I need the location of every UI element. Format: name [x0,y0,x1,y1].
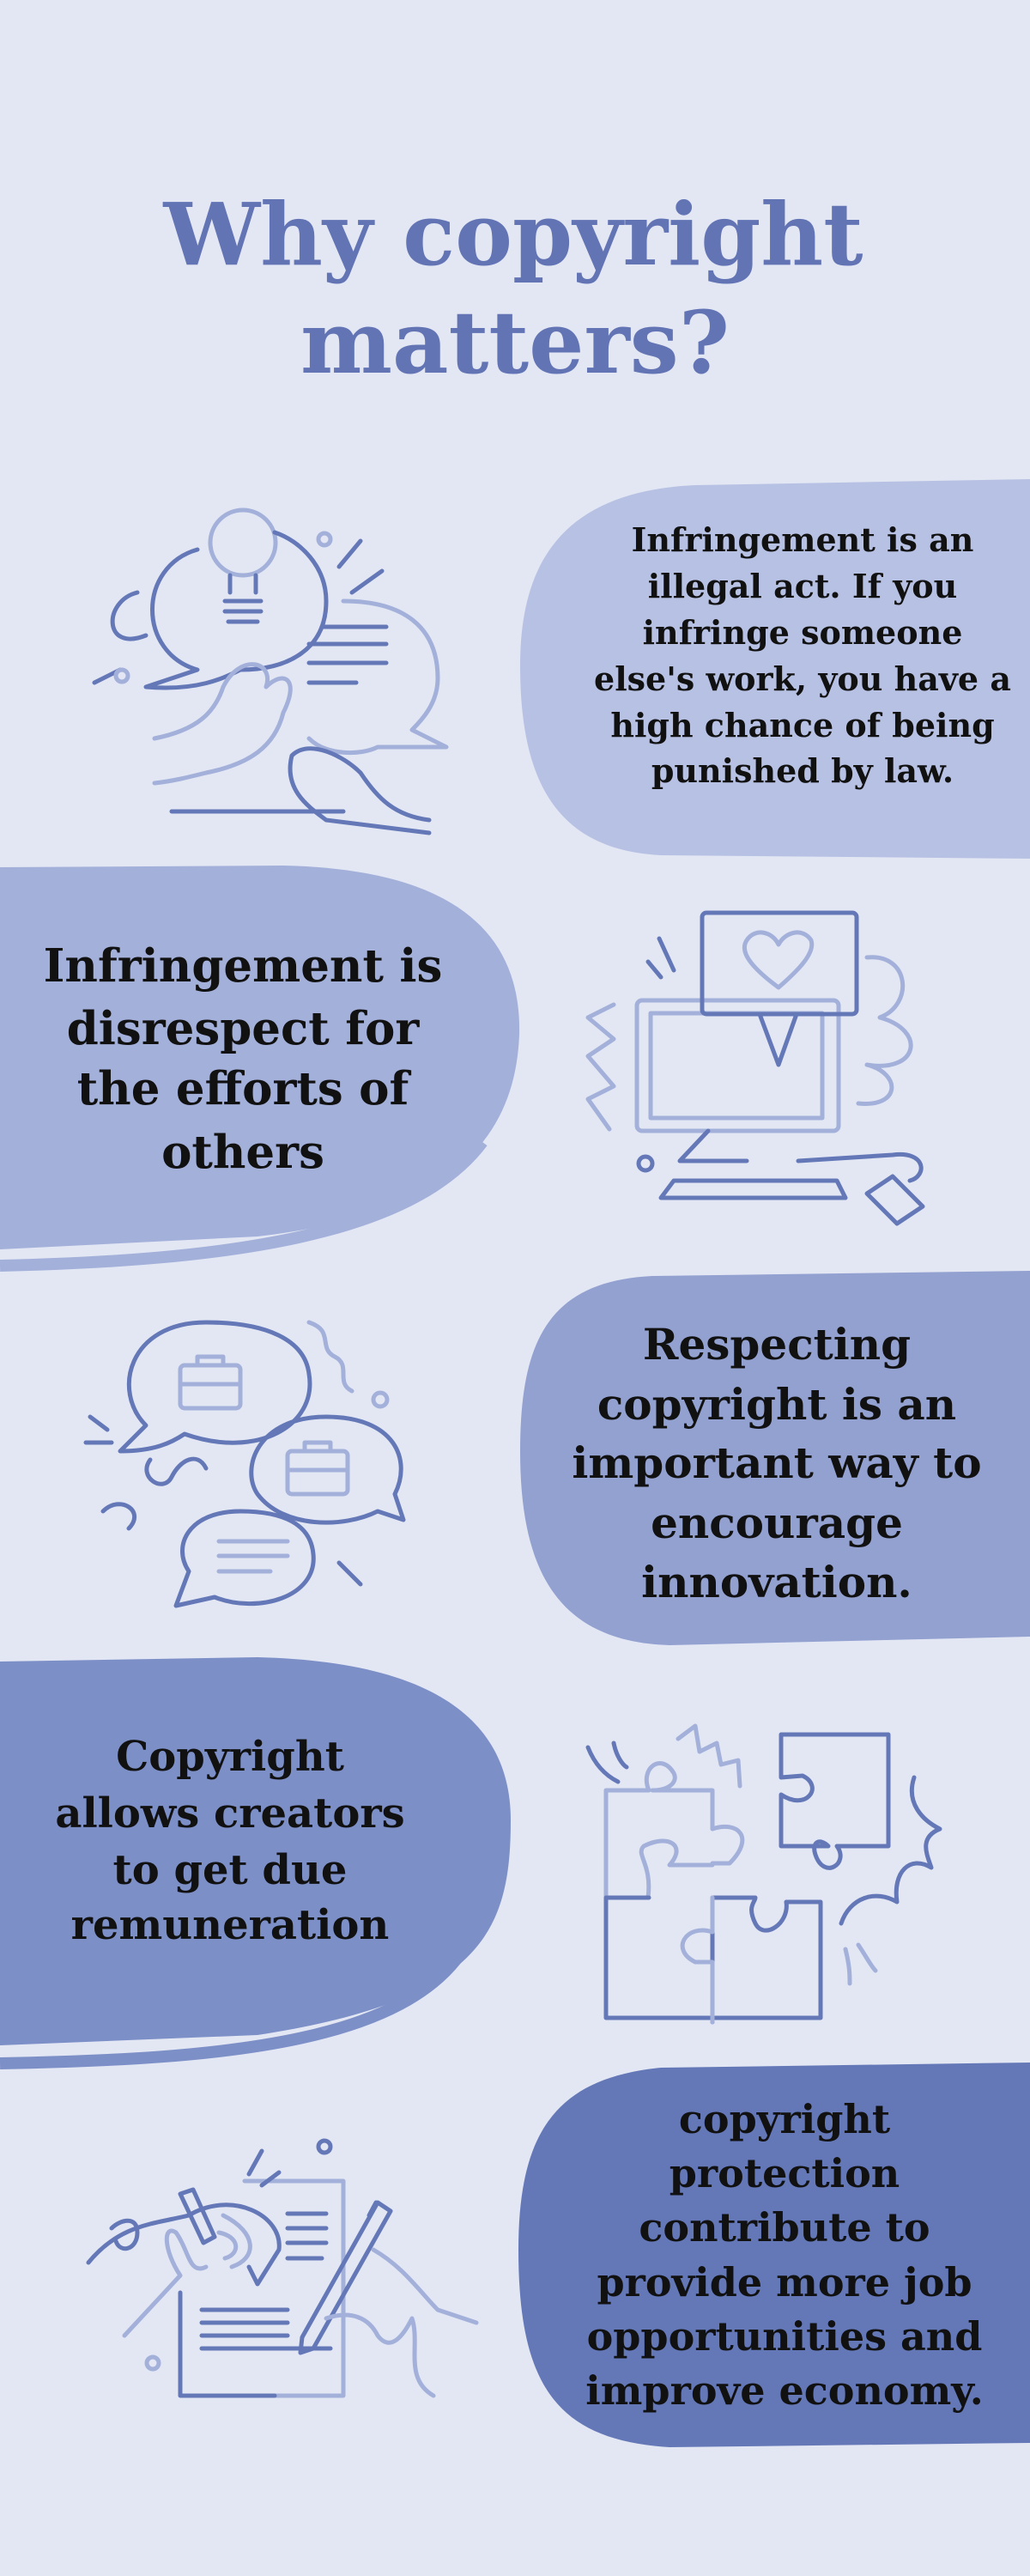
text: illegal act: Infringement is an [632,520,973,559]
title [162,184,863,393]
text: remuneration: to get due [113,1846,347,1894]
text: economy: copyright [679,2096,891,2142]
icon: document signing [88,2141,476,2396]
text: disrespect: disrespect for [67,1002,420,1055]
text: illegal act [594,520,1011,790]
icon: chat bubbles with briefcases [86,1322,403,1606]
text: economy [585,2096,984,2414]
text: innovation: important way to [572,1437,982,1488]
text: economy: improve economy. [585,2367,984,2414]
panel: job opportunities [518,2063,1030,2447]
text: illegal act: high chance of being [610,706,995,744]
text: innovation: copyright is an [597,1379,956,1430]
title: Why copyright [162,184,863,285]
text: disrespect: Infringement is [44,939,442,993]
text: economy: opportunities and [587,2313,982,2360]
text: illegal act: punished by law. [651,751,954,790]
text: illegal act: illegal act. If you [648,567,957,605]
text: disrespect: the efforts of [77,1062,412,1115]
text: economy: contribute to [639,2204,930,2251]
title: matters? [300,292,730,393]
text: economy: protection [670,2150,900,2196]
icon: lightbulb, speech bubbles and hands [94,510,446,833]
text: innovation [572,1319,982,1607]
text: remuneration: allows creators [55,1789,405,1838]
icon: computer with heart [588,913,923,1224]
text: innovation: encourage [651,1498,903,1548]
text: remuneration: remuneration [71,1901,389,1949]
text: disrespect [44,939,442,1179]
text: illegal act: infringe someone [643,613,962,652]
panel: encourage innovation [520,1271,1030,1645]
text: disrespect: others [161,1126,324,1179]
panel: due remuneration [0,1657,511,2063]
text: remuneration: Copyright [116,1733,344,1781]
text: remuneration [55,1733,405,1949]
text: innovation: innovation. [641,1557,912,1607]
icon: puzzle pieces [588,1726,940,2022]
panel: infringement is illegal [520,479,1030,859]
text: innovation: Respecting [643,1319,911,1370]
text: illegal act: else's work, you have a [594,659,1011,698]
text: economy: provide more job [597,2259,972,2306]
panel: disrespect [0,866,519,1266]
